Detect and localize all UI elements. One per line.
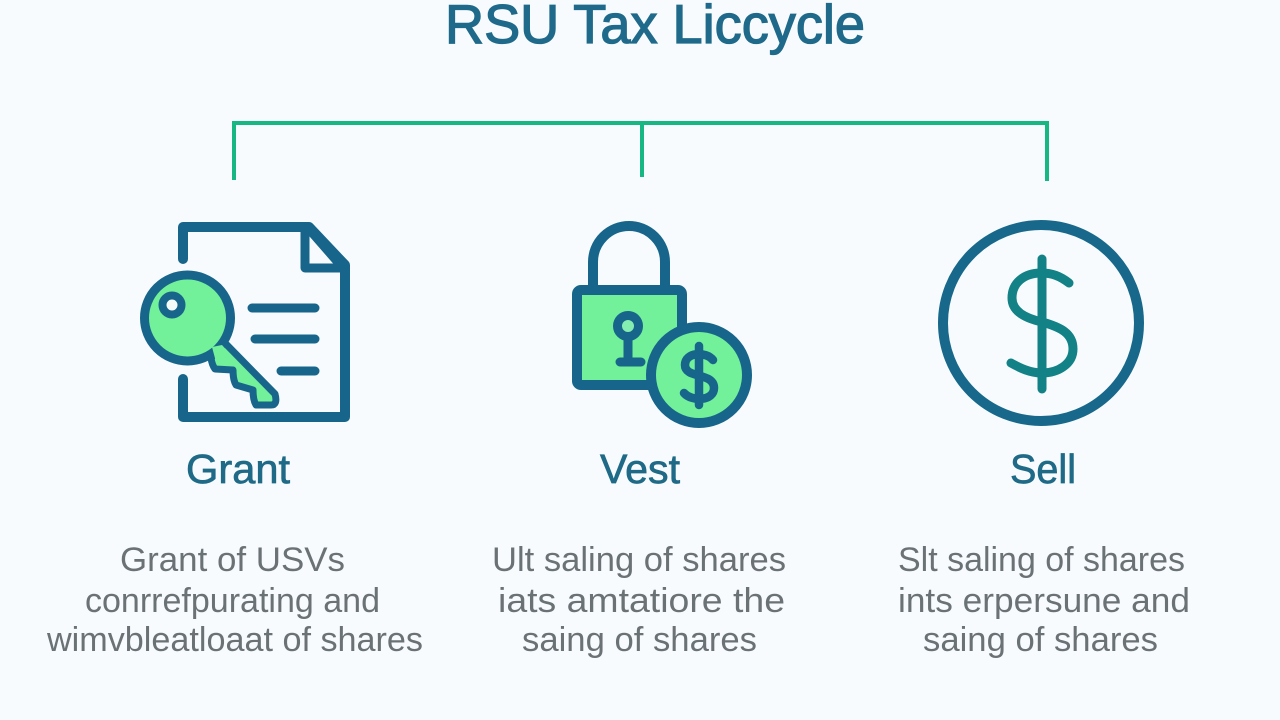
text block: vest description: Ult saling of shares — [492, 541, 786, 579]
icon: document with key — [144, 227, 345, 417]
panel: grant — [46, 227, 423, 659]
text block: vest description: iats amtatiore the — [498, 582, 785, 620]
panel: vest — [492, 226, 786, 659]
text block: vest description: saing of shares — [522, 621, 757, 659]
text block: grant description: Grant of USVs — [120, 541, 345, 579]
text block: grant description: wimvbleatloaat of shares — [46, 621, 423, 659]
text block: sell description — [898, 541, 1190, 659]
text block: grant description: conrrefpurating and — [85, 582, 380, 620]
panel: sell — [898, 225, 1190, 659]
text block: vest description — [492, 541, 786, 659]
text block: sell description: saing of shares — [923, 621, 1158, 659]
text block: grant description — [46, 541, 423, 659]
connector bracket — [234, 123, 1047, 181]
icon: dollar circle — [943, 225, 1139, 421]
heading: sell: Sell — [1010, 446, 1076, 492]
heading: grant: Grant — [186, 446, 291, 492]
text block: sell description: Slt saling of shares — [898, 541, 1185, 579]
icon: padlock with coin — [577, 226, 747, 423]
text block: sell description: ints erpersune and — [898, 582, 1190, 620]
heading: vest: Vest — [600, 446, 681, 492]
